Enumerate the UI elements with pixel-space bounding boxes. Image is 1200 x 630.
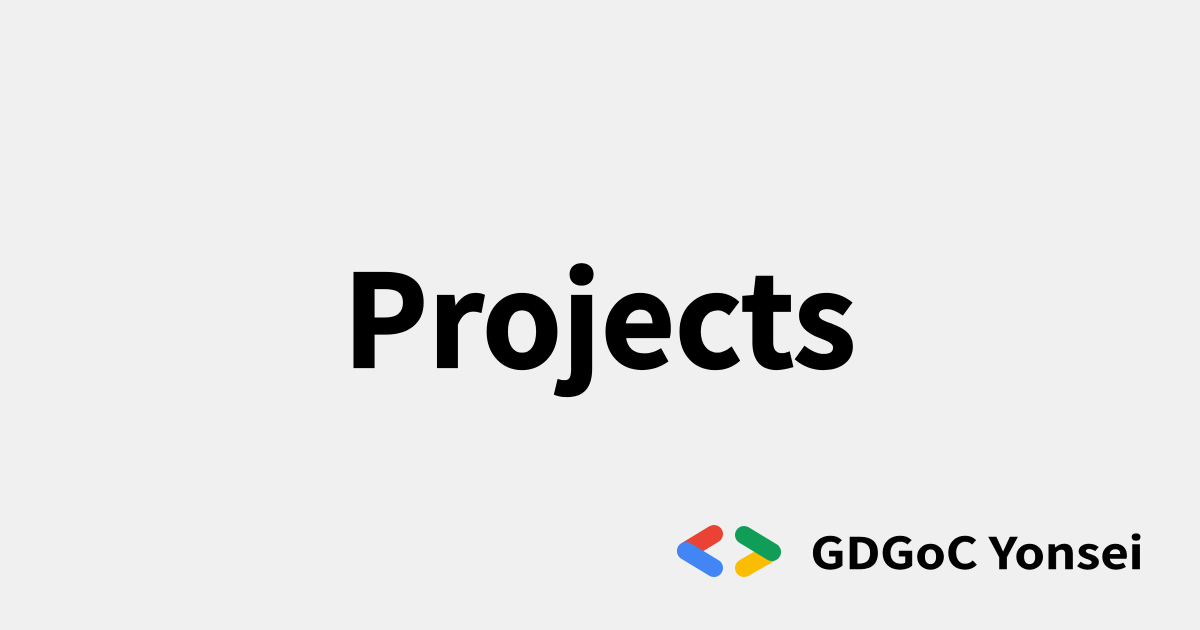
- title: Projects: [343, 220, 856, 404]
- icon: GDG logo: [686, 534, 772, 568]
- brand name: GDGoC Yonsei: [810, 519, 1144, 582]
